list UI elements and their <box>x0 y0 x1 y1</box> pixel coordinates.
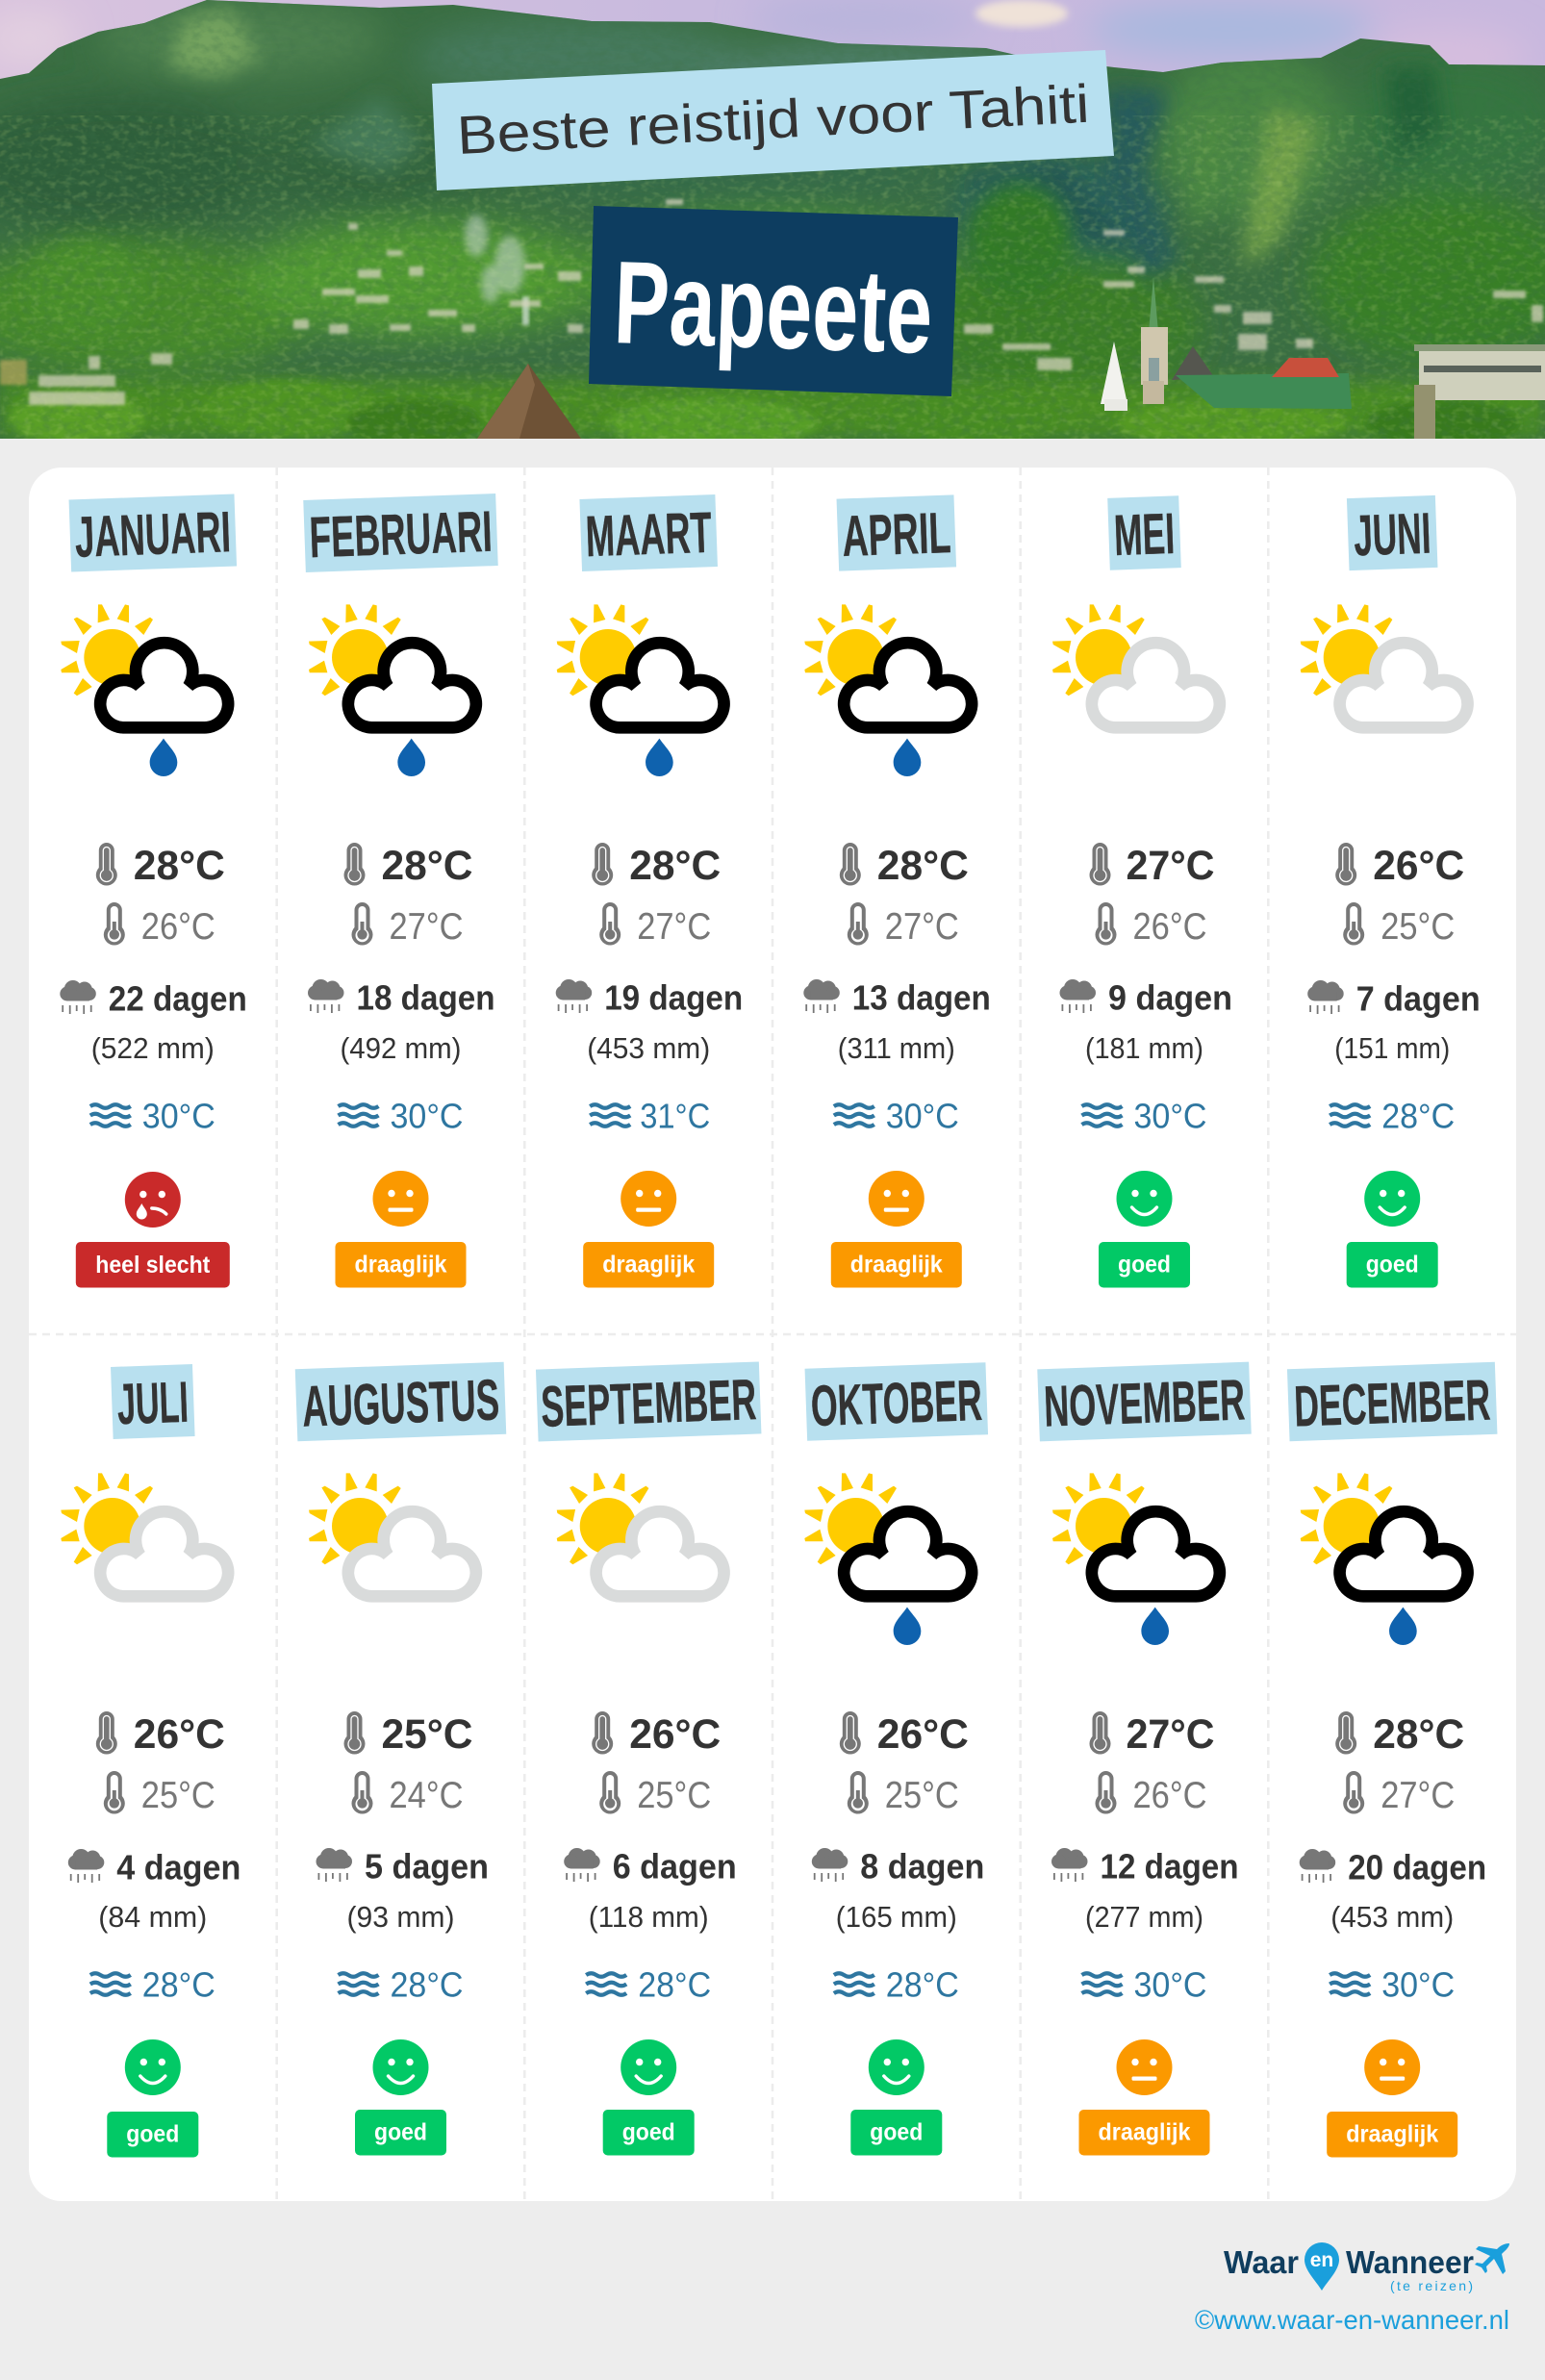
panel: oktober <box>804 1362 988 2155</box>
rain days <box>1060 977 1232 1018</box>
sea temperature <box>590 1097 710 1135</box>
rain days <box>60 979 247 1018</box>
rating: goed: goed <box>374 2118 427 2145</box>
rain days: 9 dagen <box>1108 977 1232 1018</box>
rating: heel slecht: heel slecht <box>95 1252 211 1279</box>
smoke <box>465 215 525 303</box>
min temperature: 27°C <box>637 906 711 948</box>
panel: juni <box>1301 495 1481 1287</box>
rain days: 4 dagen <box>116 1847 241 1887</box>
rating: goed: goed <box>622 2118 675 2145</box>
heading: juni <box>1347 495 1437 570</box>
rainfall: (151 mm) <box>1334 1031 1450 1065</box>
rainfall: (453 mm) <box>1330 1900 1454 1934</box>
heading: november: NOVEMBER <box>1043 1367 1246 1439</box>
max temperature: 28°C <box>629 843 721 889</box>
sea temperature: 30°C <box>1133 1097 1206 1135</box>
panel: februari <box>303 494 498 1287</box>
heading: februari: FEBRUARI <box>308 499 494 570</box>
rating: goed: goed <box>1366 1251 1419 1278</box>
min temperature <box>352 902 464 948</box>
rain days: 6 dagen <box>613 1847 737 1886</box>
min temperature: 27°C <box>885 906 959 948</box>
min temperature <box>848 902 959 948</box>
smiley: fair <box>869 1171 924 1227</box>
heading: juni: JUNI <box>1353 501 1431 568</box>
heading: mei: MEI <box>1113 501 1176 568</box>
panel: december <box>1287 1362 1497 2157</box>
min temperature: 24°C <box>389 1775 464 1816</box>
rain days: 7 dagen <box>1356 979 1481 1018</box>
heading: oktober: OKTOBER <box>810 1368 983 1438</box>
max temperature: 27°C <box>1126 843 1214 889</box>
rain days: 22 dagen <box>109 979 247 1018</box>
rating: draaglijk: draaglijk <box>1346 2120 1438 2147</box>
logo: Waar en Wanneer <box>1224 2242 1509 2293</box>
rain days: 5 dagen <box>365 1847 489 1886</box>
rain days <box>68 1847 241 1887</box>
rating: goed: goed <box>870 2118 923 2145</box>
rainfall: (118 mm) <box>589 1900 709 1934</box>
panel: april <box>803 494 991 1287</box>
panel: months card <box>29 468 1516 2201</box>
min temperature: 26°C <box>1133 1775 1206 1816</box>
max temperature: 25°C <box>381 1711 473 1758</box>
max temperature: 28°C <box>134 843 225 889</box>
sea temperature: 28°C <box>638 1964 711 2005</box>
sea temperature <box>1081 1964 1206 2005</box>
hero photo: Papeete mountains <box>0 0 1545 448</box>
min temperature <box>848 1771 959 1816</box>
sea temperature <box>834 1097 959 1135</box>
min temperature <box>352 1771 464 1816</box>
rain days <box>308 977 494 1018</box>
icon: sun and light cloud <box>61 1473 228 1596</box>
rain days <box>1307 979 1481 1018</box>
icon: sun, cloud and rain <box>1052 1473 1220 1645</box>
logo: Waar en Wanneer: Wanneer <box>1346 2244 1474 2280</box>
heading: oktober <box>805 1362 988 1441</box>
rating: draaglijk: draaglijk <box>850 1251 943 1278</box>
rain days: 19 dagen <box>604 977 743 1018</box>
max temperature <box>1089 843 1214 889</box>
rain days <box>1051 1847 1239 1886</box>
min temperature: 25°C <box>637 1775 711 1816</box>
sea temperature: 28°C <box>886 1964 959 2005</box>
rainfall: (522 mm) <box>91 1031 215 1065</box>
panel: september <box>536 1361 761 2155</box>
sea temperature: 28°C <box>142 1964 215 2005</box>
rainfall: (277 mm) <box>1085 1900 1203 1934</box>
smiley: good <box>125 2039 181 2095</box>
sea temperature: 28°C <box>391 1964 464 2005</box>
rating: goed: goed <box>126 2120 179 2147</box>
sea temperature: 30°C <box>886 1097 959 1135</box>
sea temperature <box>1330 1097 1455 1135</box>
max temperature: 26°C <box>1373 843 1464 889</box>
min temperature <box>104 1771 215 1816</box>
max temperature: 26°C <box>629 1711 721 1758</box>
rating: goed <box>603 2110 695 2155</box>
heading: maart <box>579 494 718 571</box>
rain days <box>1300 1847 1486 1887</box>
min temperature: 27°C <box>389 906 464 948</box>
icon: sun and light cloud <box>1301 604 1468 727</box>
min temperature <box>104 902 215 948</box>
heading: november <box>1037 1362 1252 1441</box>
sea temperature: 30°C <box>142 1097 215 1135</box>
sea temperature <box>1081 1097 1206 1135</box>
rainfall: (181 mm) <box>1085 1031 1203 1065</box>
icon: sun, cloud and rain <box>804 1473 972 1645</box>
icon: sun and light cloud <box>1052 604 1220 727</box>
sea temperature <box>90 1964 215 2005</box>
sea temperature <box>339 1097 464 1135</box>
church <box>1101 342 1127 404</box>
icon: sun, cloud and rain <box>309 604 476 776</box>
min temperature <box>599 902 711 948</box>
rating: goed <box>107 2112 198 2157</box>
heading: januari: JANUARI <box>74 499 232 570</box>
rainfall: (492 mm) <box>341 1031 462 1065</box>
panel: november <box>1037 1362 1252 2155</box>
rating: draaglijk <box>1079 2110 1210 2155</box>
sea temperature <box>834 1964 959 2005</box>
logo: Waar en Wanneer: en <box>1310 2249 1333 2271</box>
icon: sun and light cloud <box>309 1473 476 1596</box>
smiley: fair <box>1364 2039 1420 2095</box>
min temperature: 25°C <box>1380 906 1455 948</box>
panel: mei <box>1052 495 1232 1287</box>
logo: Waar en Wanneer: (te reizen) <box>1390 2278 1473 2293</box>
smiley: fair <box>621 1171 676 1227</box>
min temperature <box>599 1771 711 1816</box>
rating: draaglijk <box>335 1242 466 1287</box>
city name block <box>589 206 958 396</box>
rainfall: (93 mm) <box>346 1900 454 1934</box>
rainfall: (165 mm) <box>836 1900 957 1934</box>
smiley: good <box>621 2039 676 2095</box>
rain days: 8 dagen <box>860 1847 984 1886</box>
icon: sun, cloud and rain <box>1301 1473 1468 1645</box>
rainfall: (311 mm) <box>838 1031 955 1065</box>
heading: mei <box>1107 495 1181 570</box>
rain days <box>812 1847 984 1886</box>
heading: januari <box>69 494 237 571</box>
panel: januari <box>60 494 247 1287</box>
thatched hut <box>477 364 581 439</box>
right building <box>1419 350 1545 400</box>
heading: juli <box>111 1364 195 1439</box>
smiley: very bad <box>125 1172 181 1228</box>
rain days: 12 dagen <box>1101 1847 1239 1886</box>
rain days: 20 dagen <box>1348 1847 1486 1887</box>
website credit: ©www.waar-en-wanneer.nl <box>1195 2305 1509 2335</box>
icon: sun and light cloud <box>557 1473 724 1596</box>
smiley: fair <box>1116 2039 1172 2095</box>
title banner: Beste reistijd voor Tahiti <box>455 73 1091 165</box>
smiley: good <box>869 2039 924 2095</box>
sea temperature <box>1330 1964 1455 2005</box>
icon: sun, cloud and rain <box>557 604 724 776</box>
max temperature: 28°C <box>381 843 473 889</box>
sea temperature: 31°C <box>640 1097 710 1135</box>
sea temperature: 28°C <box>1381 1097 1455 1135</box>
title banner <box>432 50 1114 190</box>
smiley: good <box>1364 1171 1420 1227</box>
rainfall: (84 mm) <box>98 1900 207 1934</box>
panel: maart <box>556 494 743 1287</box>
rating: draaglijk <box>583 1242 714 1287</box>
icon: sun, cloud and rain <box>804 604 972 776</box>
logo: Waar en Wanneer: Waar <box>1224 2244 1299 2280</box>
max temperature: 26°C <box>134 1711 225 1758</box>
min temperature: 25°C <box>141 1775 215 1816</box>
rating: goed <box>850 2110 942 2155</box>
min temperature: 26°C <box>1133 906 1206 948</box>
max temperature: 28°C <box>877 843 969 889</box>
rain days <box>556 977 743 1018</box>
heading: juli: JULI <box>116 1370 190 1436</box>
heading: augustus <box>295 1362 506 1441</box>
smiley: fair <box>373 1171 429 1227</box>
rating: draaglijk: draaglijk <box>354 1251 447 1278</box>
rating: draaglijk: draaglijk <box>1099 2118 1191 2145</box>
rain days: 13 dagen <box>852 977 991 1018</box>
rain days: 18 dagen <box>356 977 494 1018</box>
sea temperature <box>339 1964 464 2005</box>
rating: heel slecht <box>76 1242 230 1287</box>
rating: goed <box>355 2110 446 2155</box>
min temperature <box>1095 902 1206 948</box>
rating: draaglijk <box>1327 2112 1457 2157</box>
heading: maart: MAART <box>585 500 713 569</box>
rain days <box>803 977 991 1018</box>
smiley: good <box>1116 1171 1172 1227</box>
heading: april <box>837 494 956 571</box>
sea temperature: 30°C <box>391 1097 464 1135</box>
heading: september <box>536 1361 761 1442</box>
sea temperature: 30°C <box>1381 1964 1455 2005</box>
rating: draaglijk: draaglijk <box>602 1251 695 1278</box>
max temperature: 27°C <box>1126 1711 1214 1758</box>
min temperature: 25°C <box>885 1775 959 1816</box>
rain days <box>564 1847 737 1886</box>
city name block: Papeete <box>612 237 934 378</box>
sea temperature: 30°C <box>1133 1964 1206 2005</box>
icon: sun, cloud and rain <box>61 604 228 776</box>
rating: goed <box>1099 1242 1190 1287</box>
rainfall: (453 mm) <box>587 1031 710 1065</box>
sea temperature <box>586 1964 711 2005</box>
min temperature <box>1343 902 1455 948</box>
rating: goed <box>1347 1242 1438 1287</box>
sea temperature <box>90 1097 215 1135</box>
rain days <box>316 1847 489 1886</box>
max temperature: 26°C <box>877 1711 969 1758</box>
min temperature <box>1095 1771 1206 1816</box>
max temperature <box>1089 1711 1214 1758</box>
heading: augustus: AUGUSTUS <box>301 1367 500 1439</box>
rating: draaglijk <box>831 1242 962 1287</box>
heading: april: APRIL <box>841 500 951 569</box>
buildings on hillside <box>0 199 1543 405</box>
panel: juli <box>61 1364 241 2157</box>
min temperature: 27°C <box>1380 1775 1455 1816</box>
panel: augustus <box>295 1362 506 2155</box>
smiley: good <box>373 2039 429 2095</box>
min temperature <box>1343 1771 1455 1816</box>
heading: februari <box>303 494 498 572</box>
heading: september: SEPTEMBER <box>540 1367 757 1439</box>
min temperature: 26°C <box>141 906 215 948</box>
max temperature: 28°C <box>1373 1711 1464 1758</box>
rating: goed: goed <box>1118 1251 1171 1278</box>
